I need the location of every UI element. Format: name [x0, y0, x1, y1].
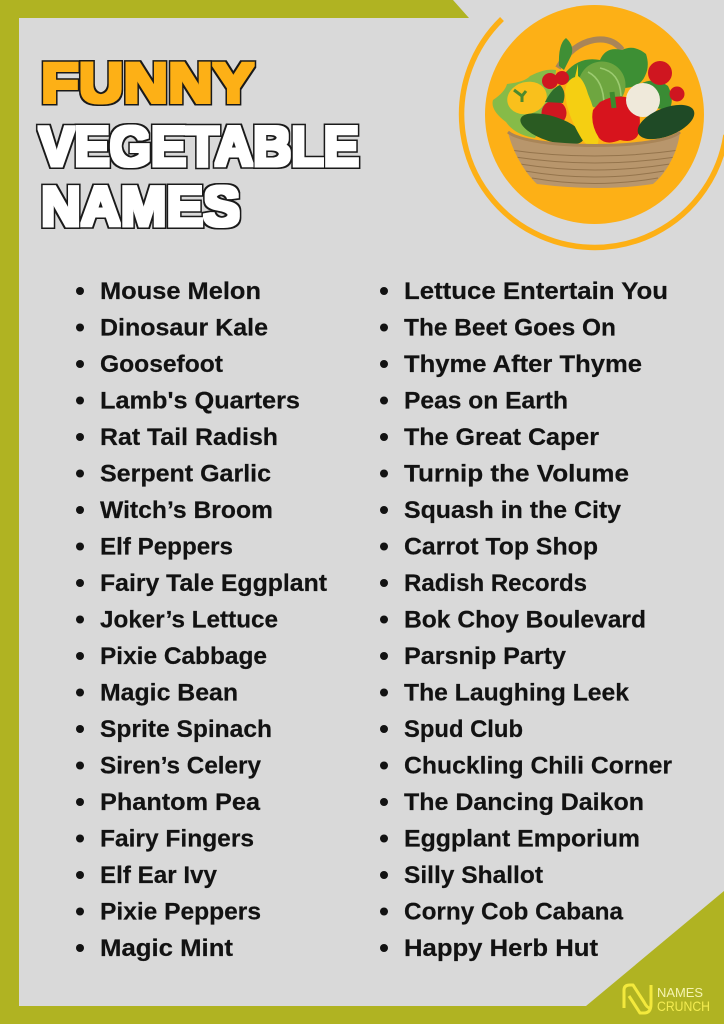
item: Spud Club	[404, 716, 523, 743]
item: Eggplant Emporium	[404, 826, 640, 852]
title line: Names: NAMES	[41, 174, 240, 238]
logo wordmark	[657, 985, 710, 1014]
item: Squash in the City	[404, 497, 622, 524]
list: right column	[380, 278, 672, 962]
icon: cabbage	[578, 62, 626, 108]
item: Bok Choy Boulevard	[404, 606, 646, 634]
icon: garlic bulb	[626, 83, 660, 117]
item: Magic Mint	[100, 935, 233, 962]
item: The Beet Goes On	[404, 314, 616, 342]
item: Dinosaur Kale	[100, 314, 268, 342]
item: Corny Cob Cabana	[404, 898, 624, 926]
item: Goosefoot	[100, 351, 223, 378]
logo wordmark: NAMES	[657, 985, 703, 1000]
item: Carrot Top Shop	[404, 534, 598, 560]
item: Phantom Pea	[100, 789, 261, 816]
item: Mouse Melon	[100, 278, 261, 305]
item: Pixie Cabbage	[100, 643, 267, 670]
item: Serpent Garlic	[100, 460, 271, 488]
item: Elf Peppers	[100, 534, 233, 560]
title line: Vegetable: VEGETABLE	[39, 114, 359, 178]
icon: leafy greens	[493, 38, 672, 138]
icon: woven basket	[508, 132, 680, 188]
item: Joker’s Lettuce	[100, 606, 278, 634]
item: The Great Caper	[404, 424, 599, 451]
icon: dark leaf	[545, 85, 564, 103]
icon: yellow banana pepper	[565, 64, 598, 147]
title line: Funny: FUNNY	[41, 51, 254, 114]
item: Elf Ear Ivy	[100, 862, 218, 889]
item: Silly Shallot	[404, 862, 543, 889]
item: Peas on Earth	[404, 388, 568, 414]
icon: left cucumber	[517, 107, 587, 151]
icon: tomatoes	[542, 61, 684, 126]
orange circle	[485, 5, 704, 224]
item: Pixie Peppers	[100, 898, 261, 926]
illustration: vegetable basket on orange circle	[485, 5, 704, 224]
item: Siren’s Celery	[100, 752, 262, 780]
item: Rat Tail Radish	[100, 424, 278, 451]
item: Radish Records	[404, 570, 587, 597]
icon: N mark	[624, 985, 651, 1013]
item: Fairy Fingers	[100, 826, 254, 852]
item: The Laughing Leek	[404, 680, 630, 706]
icon: orange bell pepper	[504, 77, 550, 119]
item: Lettuce Entertain You	[404, 278, 668, 305]
title	[39, 51, 359, 238]
item: Turnip the Volume	[404, 460, 629, 488]
item: Sprite Spinach	[100, 716, 272, 743]
logo: Names Crunch	[624, 985, 710, 1014]
item: Lamb's Quarters	[100, 388, 300, 414]
item: Magic Bean	[100, 680, 238, 706]
item: Witch’s Broom	[100, 497, 273, 524]
icon: red bell pepper	[592, 96, 640, 143]
icon: right cucumber	[633, 98, 699, 146]
decorative ring arc	[462, 19, 724, 247]
item: Fairy Tale Eggplant	[100, 570, 327, 597]
item: Thyme After Thyme	[404, 351, 642, 378]
icon: basket handle	[558, 39, 622, 68]
list: left column	[76, 278, 327, 962]
item: Chuckling Chili Corner	[404, 752, 672, 780]
item: Parsnip Party	[404, 643, 567, 670]
item: Happy Herb Hut	[404, 935, 598, 962]
logo wordmark: CRUNCH	[657, 998, 710, 1014]
item: The Dancing Daikon	[404, 789, 644, 816]
